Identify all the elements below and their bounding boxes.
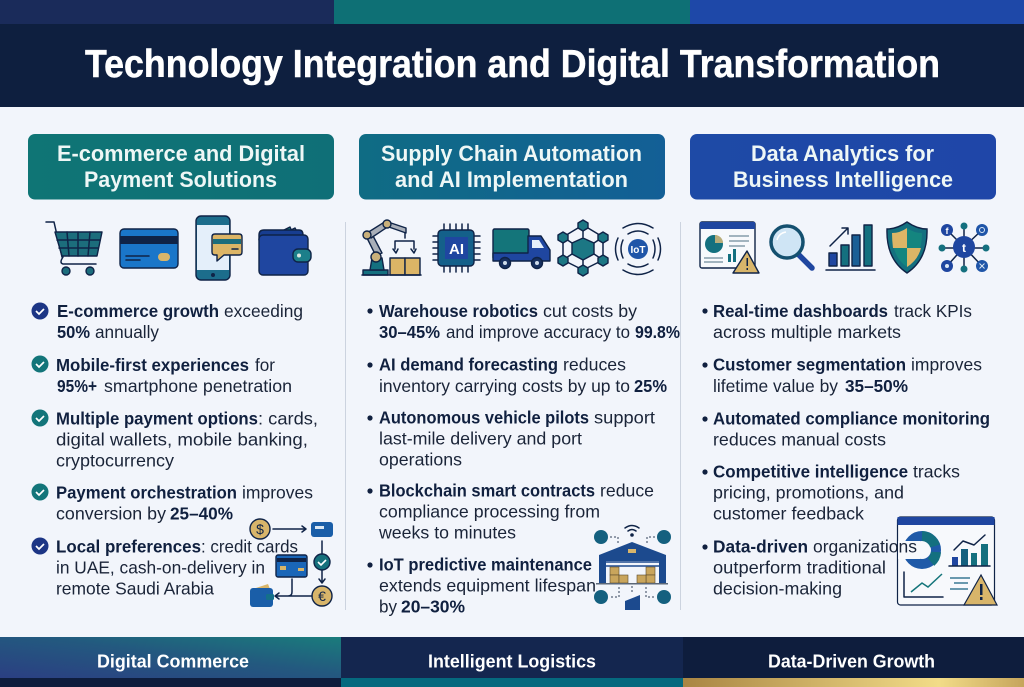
icon: IoT signal: IoT [630,245,646,256]
panel: supply chain [359,134,680,616]
icon: security shield [887,222,927,273]
bullet: payment options: cryptocurrency [56,450,174,470]
bullet: data-driven organizations: decision-making [713,578,842,598]
bullet: e-commerce growth: annually [95,322,159,342]
bullet: AI demand forecasting: inventory carrying costs by up to [379,376,630,396]
bullet: real-time dashboards [702,301,972,342]
bullet: automated compliance [702,408,990,450]
diagram: payment flow: $ [256,521,264,537]
bullet: blockchain smart contracts: compliance processing from [379,502,600,522]
icon: AI chip: AI [449,241,464,258]
heading: data analytics: Data Analytics for [751,141,934,166]
diagram: payment flow: € [318,588,326,604]
bullet: payment options [32,408,318,470]
icon: smartphone with payment card [196,216,242,280]
bullet: competitive intelligence: customer feedback [713,504,864,524]
icon: credit card [120,229,178,268]
bullet: data-driven organizations: outperform traditional [713,558,886,578]
bullet: warehouse robotics [367,301,680,342]
bullet: customer segmentation: Customer segmentation [713,354,906,374]
icon: growth bars [826,225,875,270]
top colour band [0,0,1024,25]
bullet: AI demand forecasting: 25% [634,376,667,396]
footer label: digital commerce: Digital Commerce [97,650,249,672]
bullet: payment orchestration: improves [242,482,313,502]
bullet: local preferences [32,536,298,598]
footer label: data-driven growth: Data-Driven Growth [768,650,935,672]
heading: data analytics: Business Intelligence [733,167,953,192]
bullet: mobile-first: Mobile-first experiences [56,355,249,375]
bullet: IoT predictive maintenance: 20–30% [401,596,465,616]
bullet: AI demand forecasting: AI demand forecasting [379,354,558,374]
bullet: local preferences: in UAE, cash-on-delivery in [56,558,265,578]
icon: social network: t [962,241,966,255]
heading: data analytics [690,134,996,200]
bullet: e-commerce growth [32,301,303,342]
bullet: competitive intelligence: Competitive intelligence [713,462,908,482]
bullet: customer segmentation [702,354,982,396]
title banner [0,24,1024,107]
bullet: autonomous vehicles: Autonomous vehicle pilots [379,408,589,428]
heading: e-commerce: E-commerce and Digital [57,141,305,166]
icon: robot arm [362,220,421,275]
diagram: smart warehouse [594,526,671,610]
bullet: data-driven organizations: Data-driven [713,536,808,556]
icon: blockchain network [558,220,608,276]
bullet: competitive intelligence: tracks [913,462,960,482]
heading: e-commerce: Payment Solutions [84,167,277,192]
heading: supply chain: Supply Chain Automation [381,141,642,166]
footer label: intelligent logistics: Intelligent Logistics [428,650,596,672]
bullet: real-time dashboards: across multiple markets [713,322,901,342]
bullet: mobile-first: for [255,355,275,375]
bullet: IoT predictive maintenance: extends equipment lifespan [379,576,596,596]
bullet: real-time dashboards: Real-time dashboards [713,301,888,321]
icon: social network: f [946,226,950,236]
bullet: blockchain smart contracts [367,480,654,542]
bullet: payment options: : cards, [258,408,318,428]
bullet: blockchain smart contracts: weeks to minutes [378,522,516,542]
bullet: local preferences: Local preferences [56,536,201,556]
bullet: AI demand forecasting [367,354,667,396]
bullet: warehouse robotics: cut costs by [543,301,637,321]
heading: supply chain [359,134,665,200]
bullet: blockchain smart contracts: Blockchain smart contracts [379,480,595,500]
bullet: real-time dashboards: track KPIs [894,301,972,321]
bullet: IoT predictive maintenance: IoT predictive maintenance [379,554,592,574]
bullet: e-commerce growth: E-commerce growth [57,301,219,321]
bullet: local preferences: remote Saudi Arabia [56,578,214,598]
bullet: IoT predictive maintenance [367,554,596,616]
icon: wallet [259,227,311,275]
bullet: payment orchestration: 25–40% [170,504,233,524]
icon: IoT signal [616,224,660,274]
heading: supply chain: and AI Implementation [395,167,628,192]
bullet: data-driven organizations: organizations [813,536,917,556]
bullet: mobile-first: smartphone penetration [104,376,292,396]
diagram: payment flow [250,519,333,607]
panel: data analytics [690,134,997,605]
bullet: mobile-first: 95%+ [57,376,97,396]
bullet: payment options: Multiple payment options [56,408,258,428]
icon: shopping cart [46,222,102,275]
bullet: payment orchestration [32,482,313,524]
bullet: payment orchestration: conversion by [56,504,166,524]
bullet: IoT predictive maintenance: by [379,596,397,616]
bullet: mobile-first [32,355,292,396]
bullet: local preferences: : credit cards [201,536,298,556]
footer band [0,637,1024,687]
bullet: warehouse robotics: 99.8% [635,322,680,342]
bullet: blockchain smart contracts: reduce [600,480,654,500]
bullet: autonomous vehicles [367,408,655,470]
bullet: customer segmentation: 35–50% [845,376,908,396]
bullet: e-commerce growth: exceeding [224,301,303,321]
bullet: autonomous vehicles: operations [379,450,462,470]
bullet: automated compliance: reduces manual costs [713,430,886,450]
bullet: e-commerce growth: 50% [57,322,90,342]
heading: e-commerce [28,134,334,200]
bullet: autonomous vehicles: last-mile delivery and port [379,428,582,448]
bullet: warehouse robotics: Warehouse robotics [379,301,538,321]
diagram: analytics dashboard [898,517,997,605]
icon: magnifying glass [771,226,812,268]
bullet: competitive intelligence: pricing, promotions, and [713,482,904,502]
bullet: warehouse robotics: 30–45% [379,322,440,342]
bullet: customer segmentation: improves [911,354,982,374]
bullet: automated compliance: Automated compliance monitoring [713,408,990,428]
bullet: payment options: digital wallets, mobile banking, [56,430,308,450]
bullet: customer segmentation: lifetime value by [713,376,838,396]
icon: delivery truck [493,229,550,268]
icon: social network [938,222,990,272]
bullet: payment orchestration: Payment orchestration [56,482,237,502]
icon: AI chip [433,224,480,272]
panel: e-commerce [28,134,334,607]
bullet: AI demand forecasting: reduces [563,354,626,374]
bullet: data-driven organizations [702,536,917,598]
bullet: competitive intelligence [702,462,960,524]
bullet: autonomous vehicles: support [594,408,655,428]
bullet: warehouse robotics: and improve accuracy to [446,322,630,342]
title banner: Technology Integration and Digital Transformation [85,43,940,86]
icon: dashboard with warning [700,222,759,273]
